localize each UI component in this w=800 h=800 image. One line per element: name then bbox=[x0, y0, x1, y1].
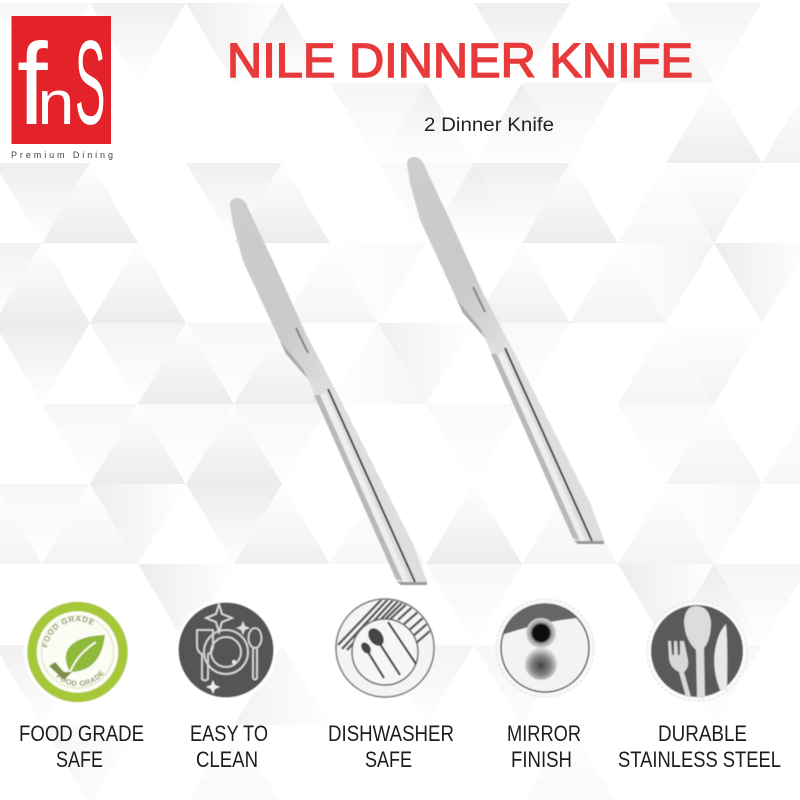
engraving bbox=[473, 287, 485, 312]
label: dishwasher safe: SAFE bbox=[365, 747, 412, 772]
blade bbox=[407, 157, 513, 357]
check mark bbox=[49, 662, 72, 680]
label: dishwasher safe bbox=[328, 721, 454, 772]
label: mirror finish: MIRROR bbox=[507, 721, 581, 746]
cutlery bbox=[361, 622, 416, 678]
label: food grade safe bbox=[19, 721, 144, 772]
handle groove bbox=[505, 348, 592, 541]
blade heel shadow bbox=[457, 300, 485, 338]
label: durable stainless steel: DURABLE bbox=[658, 721, 747, 746]
title: NILE DINNER KNIFE bbox=[227, 35, 693, 88]
fork bbox=[668, 641, 691, 697]
label: mirror finish bbox=[507, 721, 581, 772]
logo letter n: n bbox=[38, 68, 74, 138]
plate stripes bbox=[338, 597, 438, 650]
logo letter f: f bbox=[17, 19, 48, 149]
handle bbox=[308, 379, 427, 585]
handle end bbox=[397, 582, 427, 585]
knife: left bbox=[230, 198, 427, 585]
leaf bbox=[66, 635, 105, 672]
handle groove bbox=[328, 389, 415, 582]
handle bbox=[485, 338, 604, 544]
icon: dishwasher safe bbox=[336, 597, 438, 697]
logo tagline: Premium Dining bbox=[11, 150, 113, 160]
label: dishwasher safe: DISHWASHER bbox=[328, 721, 454, 746]
blade bbox=[230, 198, 336, 398]
label: mirror finish: FINISH bbox=[511, 747, 572, 772]
spoon bbox=[684, 606, 711, 698]
handle end bbox=[574, 541, 604, 544]
label: easy to clean: CLEAN bbox=[196, 747, 258, 772]
label: easy to clean bbox=[190, 721, 268, 772]
icon: durable stainless steel bbox=[647, 601, 747, 701]
label: easy to clean: EASY TO bbox=[190, 721, 268, 746]
table knife bbox=[714, 624, 727, 690]
logo: fnS Premium Dining bbox=[11, 16, 113, 160]
handle shading bbox=[491, 354, 580, 540]
knife: right bbox=[407, 157, 604, 544]
label: durable stainless steel bbox=[618, 721, 781, 772]
label: food grade safe: FOOD GRADE bbox=[19, 721, 144, 746]
badge curved text top: FOOD GRADE bbox=[42, 616, 95, 648]
badge curved text bottom: FOOD GRADE bbox=[56, 670, 105, 686]
icon: food grade badge bbox=[24, 601, 128, 703]
icon: easy to clean bbox=[175, 599, 277, 701]
engraving bbox=[296, 328, 308, 353]
subtitle: 2 Dinner Knife bbox=[424, 115, 554, 136]
label: food grade safe: SAFE bbox=[56, 747, 103, 772]
logo letter S: S bbox=[75, 17, 105, 150]
icon: mirror finish bbox=[496, 599, 594, 697]
handle shading bbox=[314, 395, 403, 581]
logo red square bbox=[12, 16, 111, 144]
blade heel shadow bbox=[280, 341, 308, 379]
